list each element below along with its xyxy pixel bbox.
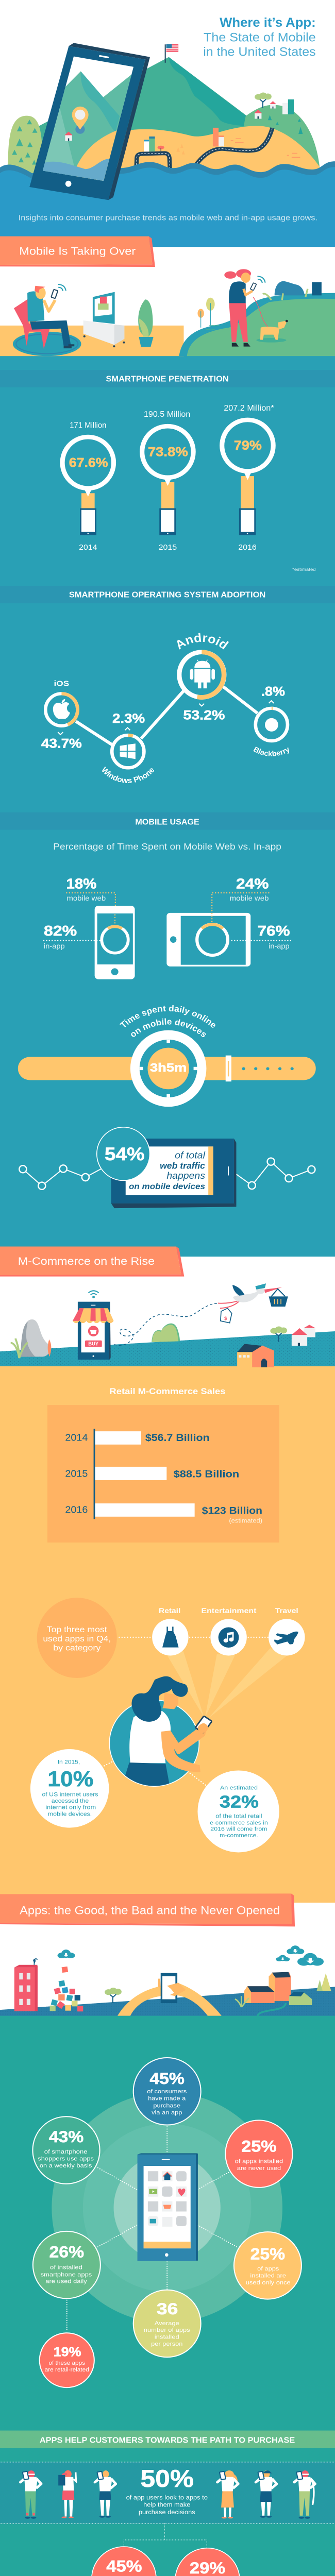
- illustration: stork with basket and price tag: [218, 1283, 288, 1323]
- panel: 50 percent stripe: of app users look to apps to: [126, 2494, 208, 2501]
- device: tablet usage split: mobile web: [230, 894, 269, 903]
- icon: watch showing 3h5m: 3h5m: [150, 1061, 187, 1074]
- device: tablet usage split: 24%: [236, 876, 269, 892]
- OS: Windows Phone: 2.3%: [112, 711, 145, 726]
- section: mobile is taking over: [0, 269, 335, 603]
- intro text: Insights into consumer purchase trends as mobile web and in-app usage grows.: [19, 214, 317, 222]
- category: travel: Travel: [275, 1607, 298, 1615]
- callout: 10 percent: internet only from: [45, 1804, 96, 1811]
- icon: watch showing 3h5m: [18, 1030, 316, 1107]
- stat: 43 percent weekly: [32, 2116, 100, 2184]
- stat: 36 apps average: Average: [155, 2320, 179, 2327]
- header band: smartphone penetration: [0, 370, 335, 387]
- callout: top three apps: [37, 1598, 117, 1678]
- illustration: pink building with stork: [14, 1958, 38, 2011]
- header band: mobile usage: MOBILE USAGE: [135, 818, 199, 827]
- chart: penetration 2015: 190.5 Million: [144, 410, 190, 419]
- section: m-commerce: [0, 1283, 335, 1543]
- panel: 50 percent stripe: [0, 2462, 335, 2523]
- chart: retail m-commerce sales bars: 2015: [65, 1468, 88, 1479]
- stat: 45 percent purchase: via an app: [152, 2109, 182, 2116]
- illustration: tree and distant houses: [270, 1325, 315, 1346]
- figure: person four: [217, 2470, 238, 2518]
- OS: iOS: 43.7%: [41, 737, 82, 751]
- illustration: potted plant: [138, 299, 154, 347]
- illustration: orange house: [237, 1344, 274, 1367]
- callout: 10 percent: of US internet users: [42, 1791, 98, 1798]
- footnote: estimated: *estimated: [292, 567, 316, 572]
- device: landscape phone: [111, 1139, 236, 1208]
- panel: 50 percent stripe: help them make: [143, 2501, 191, 2508]
- section: daily time and web traffic: [0, 1005, 316, 1277]
- illustration: woman walking dog: [224, 269, 288, 347]
- chart: retail m-commerce sales bars: $88.5 Billion: [174, 1469, 239, 1480]
- stat: 45 percent product info: [92, 2547, 156, 2576]
- illustration: living room floor: [0, 326, 184, 356]
- stat: 36 apps average: number of apps: [144, 2327, 190, 2333]
- chart: retail m-commerce sales bars: $56.7 Billion: [145, 1433, 210, 1444]
- figure: person six: [294, 2470, 315, 2519]
- illustration: right green hill with village: [235, 93, 320, 169]
- section: app stats continued: [0, 2231, 335, 2548]
- device: phone usage split: mobile web: [66, 894, 106, 903]
- device: phone usage split: in-app: [44, 942, 65, 951]
- stat: 19 percent retail: of these apps: [49, 2360, 86, 2366]
- title: Where it’s App:: [220, 15, 316, 30]
- stat: 36 apps average: 36: [157, 2300, 178, 2318]
- illustration: television on cabinet: [83, 292, 125, 347]
- illustration: hands holding phone: [118, 1973, 222, 2016]
- section banner: Mobile Is Taking Over: Mobile Is Taking Over: [19, 245, 136, 258]
- callout: 32 percent: 2016 will come from: [210, 1826, 267, 1832]
- category: retail: Retail: [159, 1607, 180, 1615]
- illustration: mountain with flag: [36, 44, 261, 173]
- chart: traffic line right: [236, 1158, 315, 1189]
- stat: 43 percent weekly: on a weekly basis: [40, 2162, 92, 2169]
- stat: 25 percent never used: of apps installed: [235, 2158, 283, 2164]
- callout: 32 percent: m-commerce.: [220, 1832, 258, 1839]
- connector dots: [119, 1636, 268, 1639]
- OS: Blackberry: Blackberry: [253, 747, 289, 756]
- device: phone usage split: [44, 876, 135, 979]
- device: phone usage split: 18%: [66, 876, 96, 892]
- figure: person five: [256, 2470, 277, 2518]
- device: landscape phone: happens: [166, 1171, 205, 1181]
- stat: 26 percent daily: 26%: [49, 2243, 84, 2261]
- section banner: Mobile Is Taking Over: [0, 236, 155, 267]
- stat: 43 percent weekly: of smartphone: [44, 2148, 88, 2155]
- stat: 25 percent used once: installed are: [250, 2273, 286, 2279]
- connector dots to callouts: [104, 1761, 206, 1786]
- header band: path to purchase: [0, 2431, 335, 2448]
- stat: 25 percent used once: 25%: [250, 2245, 285, 2263]
- OS: Windows Phone: [102, 711, 154, 783]
- illustration: bush: [152, 1324, 180, 1342]
- curved label: time spent daily: Time spent daily online: [120, 1005, 215, 1028]
- device: landscape phone: of total: [175, 1150, 206, 1161]
- callout: 32 percent: e-commerce sales in: [210, 1820, 268, 1826]
- callout: 10 percent: In 2015,: [58, 1759, 80, 1765]
- chart: penetration 2014: 171 Million: [70, 421, 106, 430]
- chart: retail m-commerce sales bars: $123 Billion: [202, 1505, 262, 1517]
- chart: penetration 2015: 73.8%: [148, 445, 188, 460]
- stat: 19 percent retail: are retail-related: [45, 2367, 89, 2373]
- illustration: woman using phone: [109, 1676, 212, 1787]
- illustration: left bush: [8, 116, 43, 173]
- illustration: houses and clouds: [235, 1945, 331, 2016]
- stat: 26 percent daily: [33, 2231, 100, 2298]
- OS: iOS: [41, 680, 82, 751]
- callout: 10 percent: [30, 1749, 109, 1828]
- category: entertainment: Entertainment: [201, 1607, 257, 1615]
- device: phone with app grid: [138, 2153, 198, 2261]
- OS: Android: Android: [177, 633, 229, 650]
- stat: 25 percent never used: [225, 2120, 293, 2188]
- callout: top three apps: by category: [53, 1643, 101, 1653]
- device: tablet usage split: 76%: [258, 923, 290, 939]
- stat: 25 percent never used: are never used: [237, 2165, 281, 2172]
- header band: mobile usage: [0, 812, 335, 829]
- concentric circles: [52, 2092, 282, 2323]
- stat: 36 apps average: per person: [151, 2341, 182, 2347]
- stat: 36 apps average: [133, 2290, 201, 2357]
- OS: Windows Phone: Windows Phone: [102, 767, 154, 783]
- stat: 19 percent retail: 19%: [54, 2345, 81, 2359]
- illustration: park hill: [179, 281, 335, 356]
- title: [203, 15, 316, 59]
- title: in the United States: [203, 45, 316, 59]
- chart: retail m-commerce sales bars: (estimated): [229, 1517, 262, 1524]
- stat: 25 percent used once: of apps: [257, 2265, 279, 2272]
- chart: retail m-commerce sales bars: 2016: [65, 1504, 88, 1515]
- stat: 25 percent never used: 25%: [241, 2137, 277, 2156]
- chart: penetration 2015: 2015: [159, 543, 177, 552]
- stat: 25 percent used once: [234, 2232, 301, 2299]
- chart: penetration 2015: [142, 410, 193, 552]
- chart: traffic line left: [19, 1165, 103, 1190]
- device: landscape phone: web traffic: [160, 1161, 205, 1171]
- illustration: speckled ground: [0, 1331, 335, 1366]
- callout: top three apps: Top three most: [47, 1625, 107, 1634]
- hero section: [0, 15, 335, 267]
- chart: penetration 2016: 79%: [234, 439, 262, 453]
- illustration: phone storefront: [73, 1291, 114, 1360]
- title: The State of Mobile: [204, 31, 316, 44]
- illustration: falling app blocks: [50, 1950, 83, 2011]
- connector dots: [67, 2127, 237, 2332]
- callout: 10 percent: mobile devices.: [48, 1811, 92, 1817]
- device: tablet usage split: [166, 876, 292, 967]
- section: OS adoption and mobile usage: [0, 633, 335, 979]
- stat: 29 percent purchase: [175, 2548, 240, 2576]
- callout: 32 percent: An estimated: [220, 1785, 258, 1791]
- illustration: tree: [105, 1988, 122, 2003]
- section banner: apps: [0, 1893, 295, 1926]
- stat: 45 percent purchase: of consumers: [147, 2088, 187, 2095]
- illustration: speckled ground: [0, 1987, 335, 2016]
- stat: 43 percent weekly: shoppers use apps: [38, 2156, 94, 2162]
- chart: penetration 2014: 2014: [79, 543, 97, 552]
- OS: Blackberry: [253, 685, 290, 756]
- callout: top three apps: used apps in Q4,: [43, 1634, 111, 1643]
- stat: 54 percent: [97, 1127, 150, 1180]
- stat: 45 percent purchase: have made a: [148, 2095, 186, 2102]
- illustration: sand hill: [76, 126, 321, 175]
- section: top apps and woman: [0, 1598, 305, 1926]
- curved label: time spent daily: on mobile devices: [131, 1018, 206, 1037]
- callout: 32 percent: 32%: [220, 1792, 259, 1811]
- device: landscape phone: on mobile devices: [129, 1182, 205, 1191]
- illustration: rock and plant: [11, 1319, 51, 1358]
- callout: 32 percent: of the total retail: [215, 1813, 262, 1820]
- stat: 36 apps average: installed: [155, 2334, 179, 2341]
- device: tablet usage split: in-app: [269, 942, 290, 951]
- OS: Blackberry: .8%: [261, 685, 285, 699]
- waves: [0, 161, 335, 247]
- category: travel: [269, 1607, 305, 1655]
- OS: Android: 53.2%: [183, 708, 225, 722]
- stat: 45 percent product info: 45%: [106, 2557, 142, 2575]
- chart: penetration 2014: 67.6%: [69, 456, 108, 470]
- illustration: small trees: [197, 298, 215, 328]
- stat: 26 percent daily: of installed: [50, 2264, 82, 2270]
- header band: smartphone penetration: SMARTPHONE PENETRATION: [106, 375, 229, 384]
- callout: 10 percent: accessed the: [52, 1798, 89, 1804]
- illustration: stork with basket and price tag: $: [224, 1316, 227, 1321]
- light beams from phone: [167, 1648, 286, 1718]
- header band: operating system adoption: SMARTPHONE OPERATING SYSTEM ADOPTION: [69, 590, 265, 600]
- panel: 50 percent stripe: 50%: [140, 2465, 194, 2493]
- stat: 43 percent weekly: 43%: [49, 2128, 83, 2146]
- section banner: M-Commerce on the Rise: [0, 1247, 184, 1277]
- callout: 32 percent: [197, 1770, 279, 1852]
- section: apps illustration and stats: [0, 1945, 335, 2332]
- chart: penetration 2016: 2016: [238, 543, 257, 552]
- category: entertainment: [201, 1607, 257, 1655]
- chart: penetration 2016: [222, 404, 274, 552]
- illustration: phone storefront: BUY: [88, 1341, 98, 1347]
- category: retail: [152, 1607, 189, 1655]
- chart: penetration 2016: 207.2 Million*: [224, 404, 274, 413]
- connector: to sub stats: [124, 2523, 207, 2548]
- figure: person two: [58, 2470, 76, 2518]
- subheading: time spent: Percentage of Time Spent on Mobile Web vs. In-app: [53, 842, 281, 852]
- section banner: M-Commerce on the Rise: M-Commerce on the Rise: [18, 1255, 155, 1267]
- heading: retail m-commerce sales: Retail M-Commerce Sales: [109, 1387, 226, 1396]
- stat: 45 percent purchase: [133, 2058, 201, 2125]
- stat: 45 percent purchase: purchase: [153, 2103, 180, 2109]
- OS: iOS: iOS: [54, 680, 69, 688]
- stat: 26 percent daily: are used daily: [45, 2278, 87, 2285]
- stat: 54 percent: 54%: [105, 1144, 144, 1164]
- stat: 45 percent purchase: 45%: [149, 2070, 185, 2088]
- header band: operating system adoption: [0, 586, 335, 603]
- illustration: tilted phone: [29, 43, 150, 200]
- chart: retail m-commerce sales bars: [47, 1405, 279, 1543]
- stat: 19 percent retail: [40, 2333, 94, 2387]
- OS: Android: [177, 633, 229, 722]
- chart: OS adoption connectors: [76, 687, 258, 745]
- header band: path to purchase: APPS HELP CUSTOMERS TOWARDS THE PATH TO PURCHASE: [40, 2436, 295, 2445]
- device: phone usage split: 82%: [44, 923, 77, 939]
- illustration: man on chair using phone: [13, 283, 81, 356]
- section: purchase stats and re-engagement: [0, 2547, 335, 2576]
- figure: person three: [95, 2470, 116, 2518]
- illustration: delivery flight path: [114, 1303, 218, 1345]
- panel: 50 percent stripe: purchase decisions: [139, 2509, 195, 2516]
- section banner: apps: Apps: the Good, the Bad and the Never Opened: [20, 1904, 280, 1917]
- chart: penetration 2014: [62, 421, 114, 552]
- callout: 10 percent: 10%: [47, 1767, 93, 1791]
- chart: retail m-commerce sales bars: 2014: [65, 1432, 88, 1443]
- figure: person one: [20, 2470, 41, 2519]
- illustration: roads and buildings: [90, 128, 300, 168]
- stat: 26 percent daily: smartphone apps: [41, 2272, 92, 2278]
- stat: 25 percent used once: used only once: [246, 2279, 291, 2286]
